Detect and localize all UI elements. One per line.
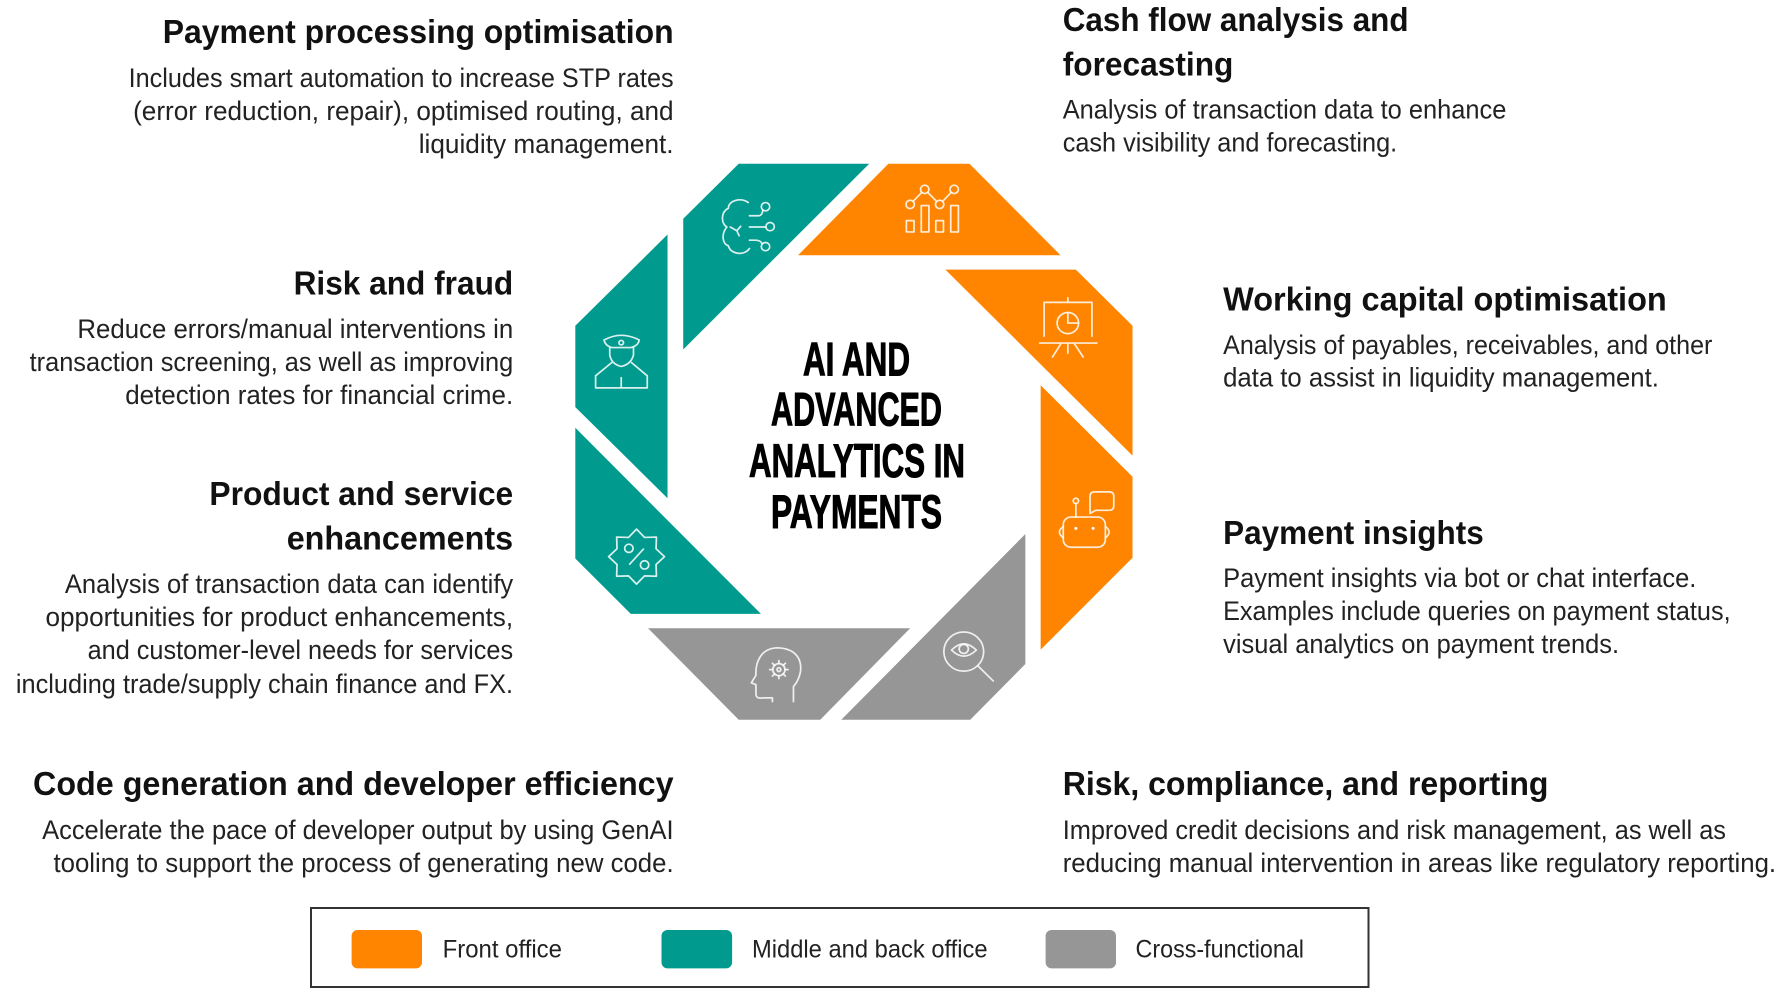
- text block: payment processing optimisation: [129, 13, 674, 159]
- text block: risk, compliance, and reporting: [1063, 765, 1776, 878]
- segment: security officer icon, middle and back office: [575, 235, 668, 498]
- legend item: front office: Front office: [443, 936, 562, 964]
- segment: chatbot icon, front office: [1041, 385, 1133, 650]
- legend item: middle and back office: Middle and back office: [752, 936, 988, 964]
- text block: code generation and developer efficiency: tooling to support the process of generating new code.: [54, 848, 674, 878]
- octagon diagram: [575, 164, 1133, 720]
- centre title: PAYMENTS: [771, 485, 942, 538]
- text block: cash flow analysis and forecasting: forecasting: [1063, 46, 1233, 82]
- text block: risk, compliance, and reporting: Risk, compliance, and reporting: [1063, 765, 1548, 802]
- text block: working capital optimisation: Working capital optimisation: [1223, 281, 1667, 318]
- text block: payment processing optimisation: (error reduction, repair), optimised routing, and: [133, 96, 674, 126]
- text block: payment insights: visual analytics on payment trends.: [1223, 629, 1619, 659]
- legend item: cross-functional: Cross-functional: [1136, 936, 1304, 964]
- legend item: middle and back office: [662, 930, 988, 968]
- segment: head with gear icon, cross-functional: [648, 628, 910, 720]
- legend item: front office: [352, 930, 562, 968]
- segment: presentation icon, front office: [945, 270, 1133, 456]
- text block: payment insights: Payment insights via bot or chat interface.: [1223, 563, 1696, 593]
- centre title: AI AND: [803, 333, 910, 386]
- text block: risk and fraud: detection rates for financial crime.: [125, 380, 513, 410]
- text block: working capital optimisation: [1223, 281, 1713, 393]
- text block: payment processing optimisation: Payment processing optimisation: [163, 13, 674, 50]
- text block: risk and fraud: Reduce errors/manual interventions in: [77, 314, 513, 344]
- text block: cash flow analysis and forecasting: cash visibility and forecasting.: [1063, 128, 1397, 158]
- text block: risk and fraud: transaction screening, as well as improving: [30, 347, 513, 377]
- text block: payment processing optimisation: Includes smart automation to increase STP rates: [129, 63, 674, 93]
- text block: product and service enhancements: enhancements: [287, 520, 513, 557]
- text block: risk, compliance, and reporting: Improved credit decisions and risk management, as well as: [1063, 815, 1726, 845]
- centre title: [749, 333, 965, 538]
- text block: working capital optimisation: Analysis of payables, receivables, and other: [1223, 330, 1713, 360]
- text block: payment processing optimisation: liquidity management.: [419, 129, 674, 159]
- text block: product and service enhancements: and customer-level needs for services: [88, 635, 513, 665]
- legend: [311, 908, 1368, 987]
- segment: cognitive brain icon, middle and back office: [683, 164, 869, 349]
- centre title: ANALYTICS IN: [749, 434, 965, 487]
- text block: risk, compliance, and reporting: reducing manual intervention in areas like regulatory reporting.: [1063, 848, 1776, 878]
- text block: cash flow analysis and forecasting: Cash flow analysis and: [1063, 1, 1409, 38]
- text block: product and service enhancements: Product and service: [209, 475, 513, 512]
- segment: chart icon, front office: [798, 164, 1061, 255]
- text block: working capital optimisation: data to assist in liquidity management.: [1223, 363, 1659, 393]
- text block: payment insights: Examples include queries on payment status,: [1223, 596, 1731, 626]
- text block: payment insights: [1223, 514, 1731, 659]
- text block: product and service enhancements: opportunities for product enhancements,: [46, 602, 513, 632]
- text block: code generation and developer efficiency: [33, 765, 674, 878]
- text block: risk and fraud: Risk and fraud: [294, 265, 513, 302]
- text block: risk and fraud: [30, 265, 513, 410]
- centre title: ADVANCED: [771, 383, 942, 436]
- legend item: cross-functional: [1046, 930, 1304, 968]
- text block: product and service enhancements: [16, 475, 514, 699]
- text block: product and service enhancements: Analysis of transaction data can identify: [65, 569, 514, 599]
- text block: cash flow analysis and forecasting: [1063, 1, 1506, 158]
- text block: product and service enhancements: including trade/supply chain finance and FX.: [16, 669, 513, 699]
- segment: magnifier eye icon, cross-functional: [841, 534, 1025, 720]
- text block: payment insights: Payment insights: [1223, 514, 1484, 551]
- text block: code generation and developer efficiency: Code generation and developer efficiency: [33, 765, 674, 802]
- segment: percent badge icon, middle and back office: [575, 428, 761, 614]
- text block: cash flow analysis and forecasting: Analysis of transaction data to enhance: [1063, 95, 1506, 125]
- text block: code generation and developer efficiency: Accelerate the pace of developer output by using GenAI: [42, 815, 674, 845]
